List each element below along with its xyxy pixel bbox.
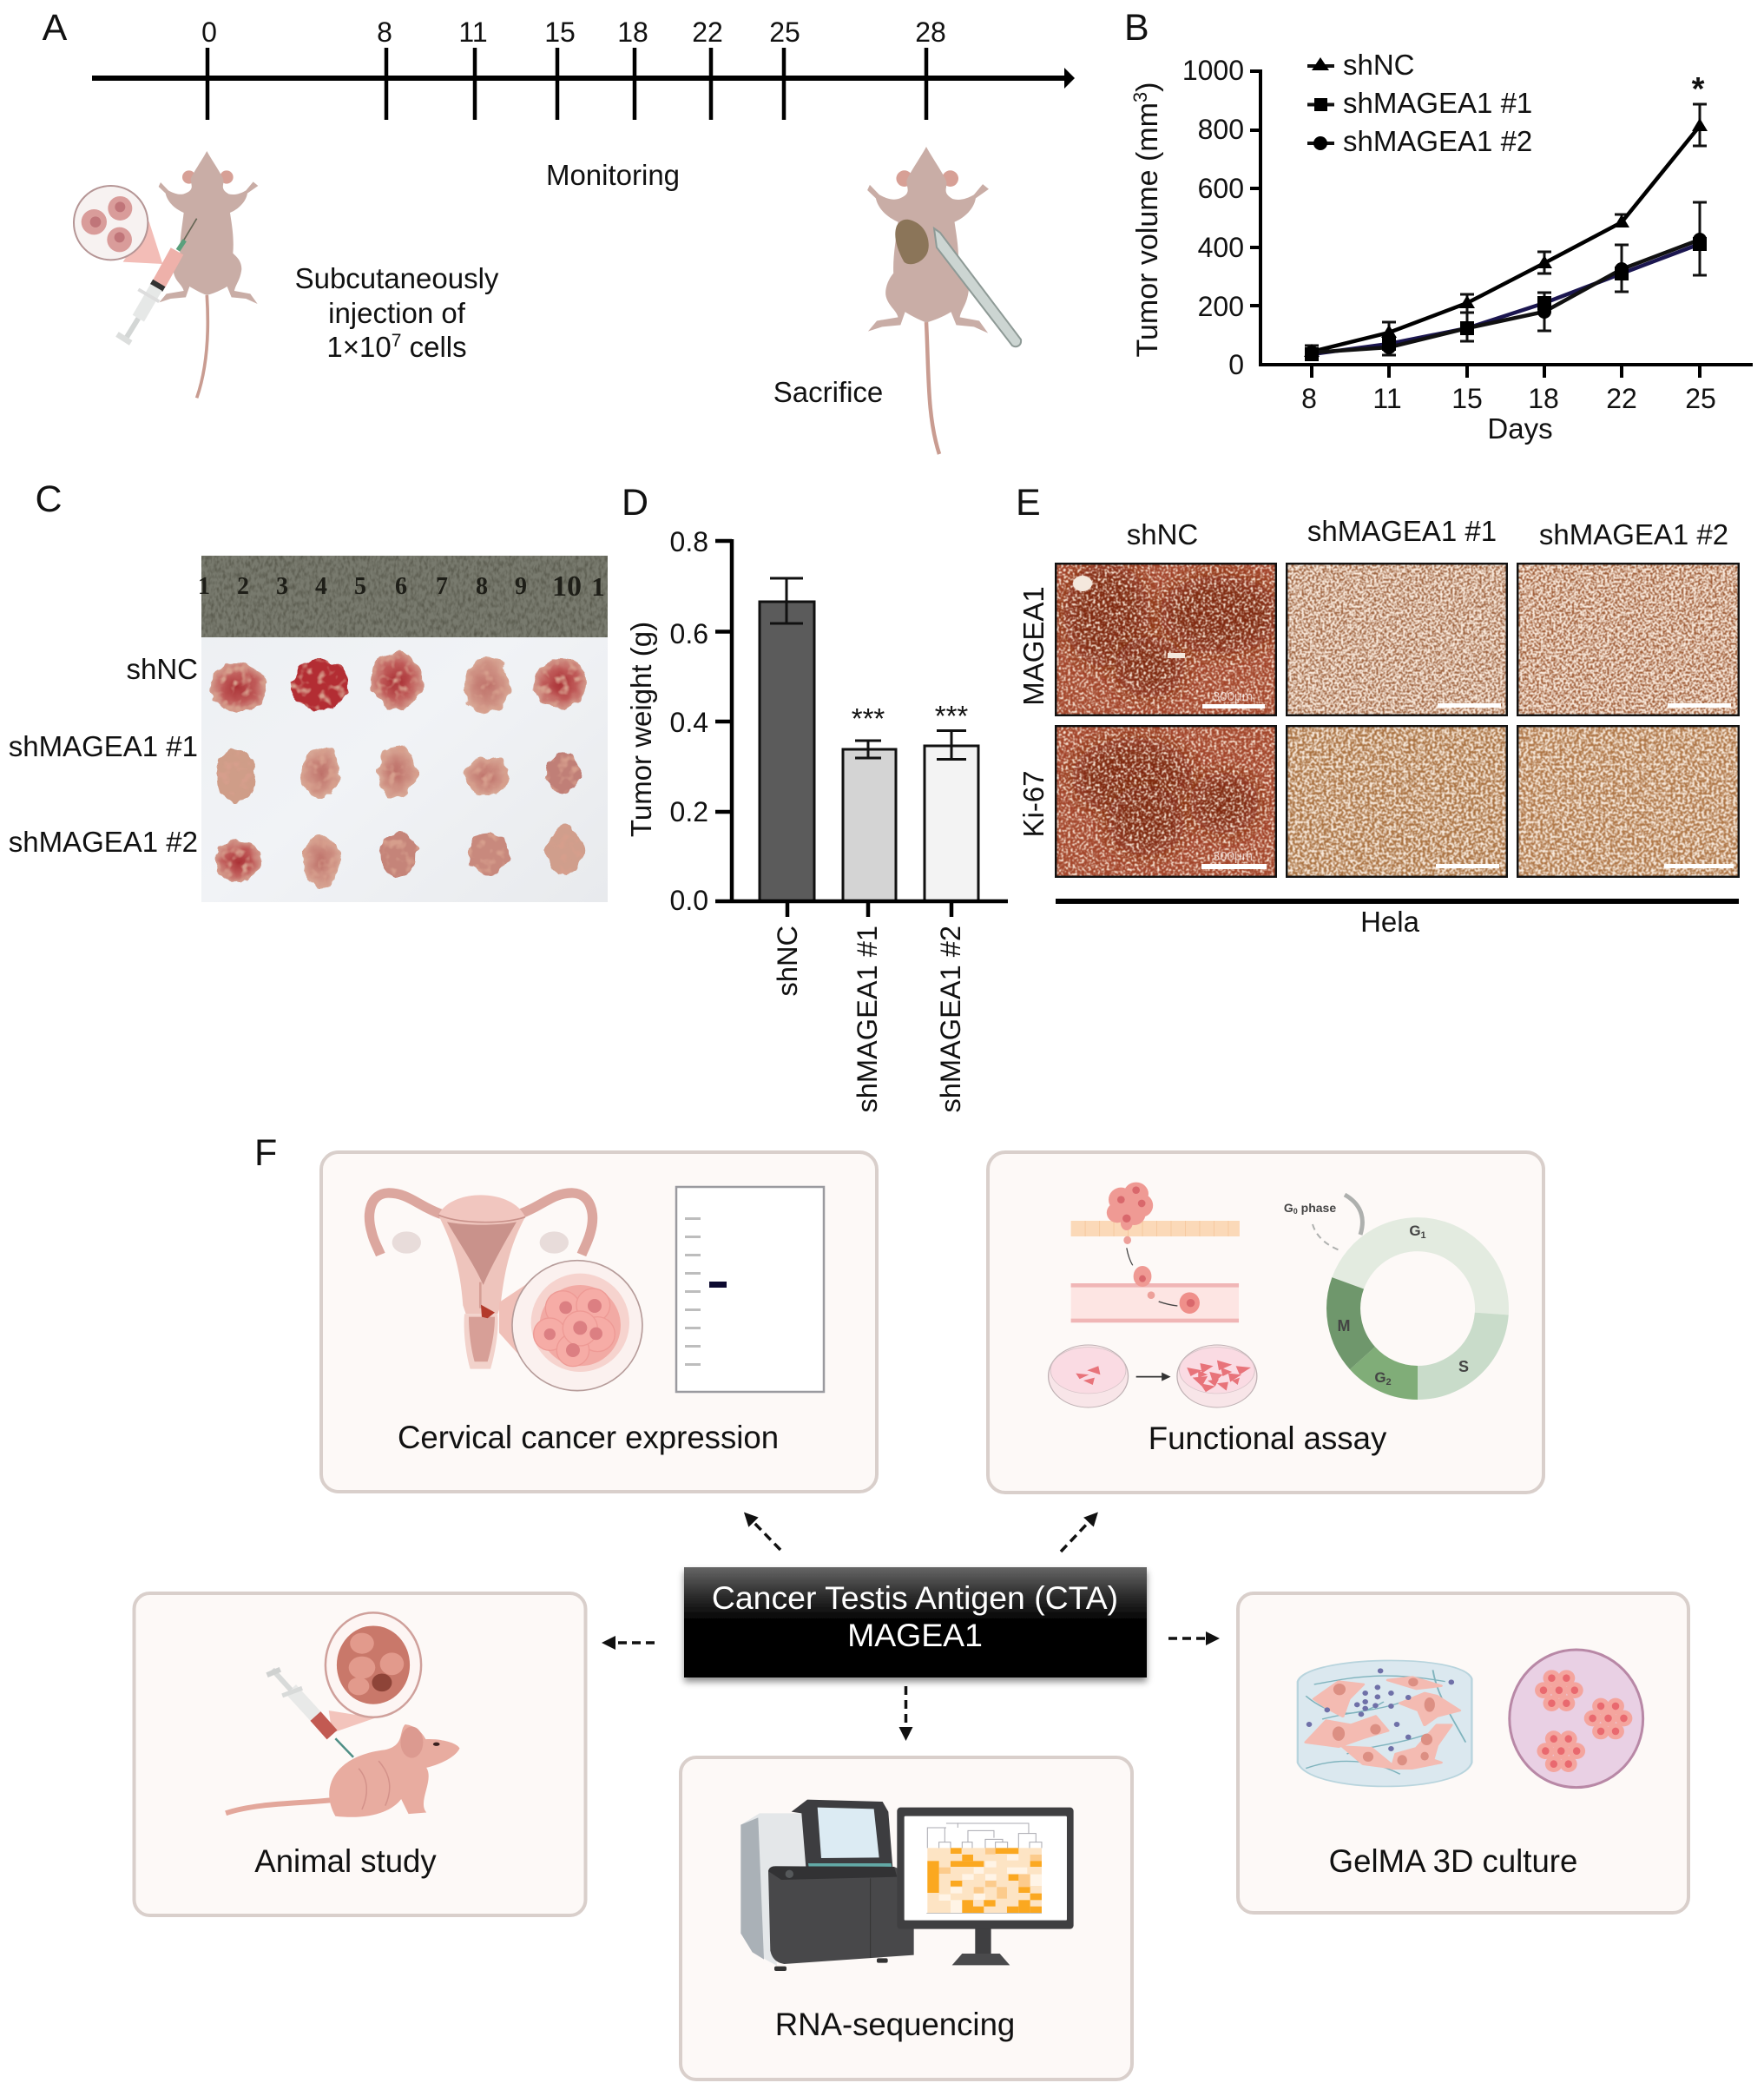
bar chart: tumor weight: 0.4 [670,707,708,738]
line chart: tumor volume: 600 [1198,173,1244,204]
line chart: tumor volume: 22 [1606,383,1637,414]
icon: metastasis and colony formation [1049,1183,1257,1407]
bar chart: tumor weight: 0.6 [670,618,708,649]
photo: excised tumors with ruler: 1 [198,573,210,600]
photo: excised tumors with ruler: 9 [515,573,527,600]
Hela bracket: Hela [1360,906,1420,938]
panel label E: E [1016,482,1041,524]
IHC: MAGEA1 shMAGEA1 #1 [1286,563,1508,716]
IHC: Ki-67 shMAGEA1 #2 [1517,725,1740,878]
cell cycle labels: M [1337,1317,1351,1335]
photo: excised tumors with ruler: 2 [237,573,249,600]
panel label B: B [1124,7,1149,49]
IHC column and row labels: MAGEA1 [1017,586,1050,706]
y axis title: Tumor volume (mm [1131,102,1164,358]
group labels for tumor photo: shMAGEA1 #1 [9,730,198,762]
timeline [92,16,1075,120]
bar chart: tumor weight: shNC [771,926,803,996]
bar chart: tumor weight: 0.0 [670,885,708,916]
arrow: to functional assay [1061,1520,1090,1552]
arrows: G0 phase loop [1313,1195,1362,1250]
photo: excised tumors with ruler: 3 [276,573,288,600]
label: monitoring: Monitoring [546,159,680,191]
line chart: tumor volume: 200 [1198,291,1244,322]
central box: CTA MAGEA1: MAGEA1 [847,1617,983,1653]
label: injection description: injection of [328,297,466,329]
line chart: tumor volume: 25 [1685,383,1716,414]
icon: mouse injection [226,1612,459,1817]
cell cycle labels: 2 [1386,1377,1392,1387]
icon: spheroid dish [1510,1650,1643,1788]
bar: shMAGEA1 #2 [925,746,978,901]
cell cycle labels: G [1409,1223,1421,1239]
panel label F: F [254,1132,277,1174]
bar chart: tumor weight: 0.8 [670,526,708,557]
photo: excised tumors with ruler: 4 [315,573,327,600]
line chart: tumor volume [1129,49,1753,445]
donut: cell cycle [1344,1235,1491,1382]
bar chart: tumor weight: *** [935,700,968,732]
IHC image grid [1055,563,1740,878]
label: sacrifice: Sacrifice [773,376,883,408]
label: injection description: 1×10 [326,331,392,363]
bar chart: tumor weight: 0.2 [670,796,708,827]
arrow: to cervical cancer expression [752,1520,780,1550]
arrow: to animal study [613,1641,655,1645]
IHC: MAGEA1 shNC [1055,563,1277,716]
legend: shNC [1343,49,1415,81]
photo: excised tumors with ruler [198,556,608,902]
bar chart: tumor weight [625,526,1008,1112]
timeline: 28 [915,16,946,48]
icon: sequencer and heatmap monitor [740,1800,1074,1971]
IHC: Ki-67 shMAGEA1 #1 [1286,725,1508,878]
bar chart: tumor weight: shMAGEA1 #2 [934,926,966,1112]
group labels for tumor photo: shMAGEA1 #2 [9,826,198,858]
panel: animal study [134,1593,585,1915]
bar chart: tumor weight: shMAGEA1 #1 [851,926,883,1112]
panel: functional assay: Functional assay [1149,1420,1387,1456]
timeline: 8 [377,16,392,48]
y axis title: ) [1131,82,1164,92]
icon: uterus with tumor magnifier [370,1193,642,1391]
IHC column and row labels [1017,515,1728,838]
panel: animal study: Animal study [254,1843,437,1879]
photo: excised tumors with ruler: 8 [476,573,488,600]
panel: RNA-sequencing: RNA-sequencing [775,2007,1015,2042]
label: injection description [295,262,499,363]
timeline: 25 [769,16,800,48]
line chart: tumor volume: 15 [1451,383,1483,414]
y axis title: Tumor weight (g) [625,622,657,837]
photo: excised tumors with ruler: 5 [354,573,366,600]
IHC: MAGEA1 shMAGEA1 #2 [1517,563,1740,716]
timeline: 0 [201,16,217,48]
line chart: tumor volume: Days [1487,412,1553,445]
IHC column and row labels: Ki-67 [1017,770,1050,838]
IHC: Ki-67 shNC [1055,725,1277,878]
cell cycle labels [1284,1201,1469,1387]
panel label C: C [35,478,63,520]
photo: excised tumors with ruler: 1 [591,571,605,602]
panel: functional assay [988,1152,1544,1493]
cell cycle labels: 1 [1421,1230,1426,1241]
cell cycle labels: G [1374,1369,1386,1386]
cell cycle labels: phase [1298,1201,1336,1215]
bar chart: tumor weight: *** [852,702,885,735]
IHC: Ki-67 shNC: 300μm [1213,849,1253,864]
panel label D: D [622,482,648,524]
line chart: tumor volume: 11 [1372,383,1402,414]
photo: excised tumors with ruler: 7 [436,573,448,600]
legend: shMAGEA1 #2 [1343,125,1532,157]
timeline: 11 [458,16,488,48]
timeline: 22 [692,16,723,48]
cell cycle labels: G [1284,1201,1293,1215]
legend [1307,49,1532,157]
icon: hydrogel with cells [1298,1660,1471,1786]
legend: shMAGEA1 #1 [1343,87,1532,119]
line chart: tumor volume: * [1692,71,1705,108]
IHC column and row labels: shMAGEA1 #1 [1307,515,1497,547]
central box: CTA MAGEA1: Cancer Testis Antigen (CTA) [712,1579,1118,1616]
cell cycle labels: 0 [1293,1207,1298,1216]
panel: GelMA 3D culture: GelMA 3D culture [1329,1843,1577,1879]
timeline: 18 [617,16,648,48]
panel: GelMA 3D culture [1238,1593,1688,1913]
group labels for tumor photo: shNC [126,653,198,685]
line chart: tumor volume: 0 [1228,349,1244,380]
cell cycle labels: S [1458,1358,1469,1375]
panel: cervical cancer expression: Cervical cancer expression [398,1420,779,1455]
panel: cervical cancer expression [321,1152,877,1492]
central box: CTA MAGEA1 [684,1567,1147,1677]
line chart: tumor volume: 400 [1198,232,1244,263]
label: injection description: cells [401,331,467,363]
arrow: to GelMA culture [1168,1637,1208,1640]
line chart: tumor volume: 8 [1301,383,1317,414]
IHC: MAGEA1 shNC: 300μm [1213,689,1253,704]
bar: shNC [760,602,814,901]
label: injection description: Subcutaneously [295,262,499,294]
y axis title: 3 [1129,92,1151,102]
photo: excised tumors with ruler: 6 [395,573,407,600]
photo: excised tumors with ruler: 10 [552,570,582,603]
line chart: tumor volume: 800 [1198,114,1244,145]
group labels for tumor photo [9,653,198,858]
icon: mouse with tumor and scalpel [867,147,1021,454]
line chart: tumor volume: 1000 [1182,55,1244,86]
label: injection description: 7 [392,331,401,351]
panel label A: A [43,7,68,49]
icon: western blot [676,1187,824,1392]
icon: mouse with injection [74,151,258,398]
IHC column and row labels: shNC [1127,518,1198,550]
panel: RNA-sequencing [681,1757,1132,2080]
Hela bracket [1056,899,1739,938]
line chart: tumor volume: 18 [1528,383,1559,414]
IHC column and row labels: shMAGEA1 #2 [1539,518,1728,550]
timeline: 15 [544,16,576,48]
bar: shMAGEA1 #1 [843,749,896,901]
arrow: to RNA sequencing [905,1686,907,1730]
